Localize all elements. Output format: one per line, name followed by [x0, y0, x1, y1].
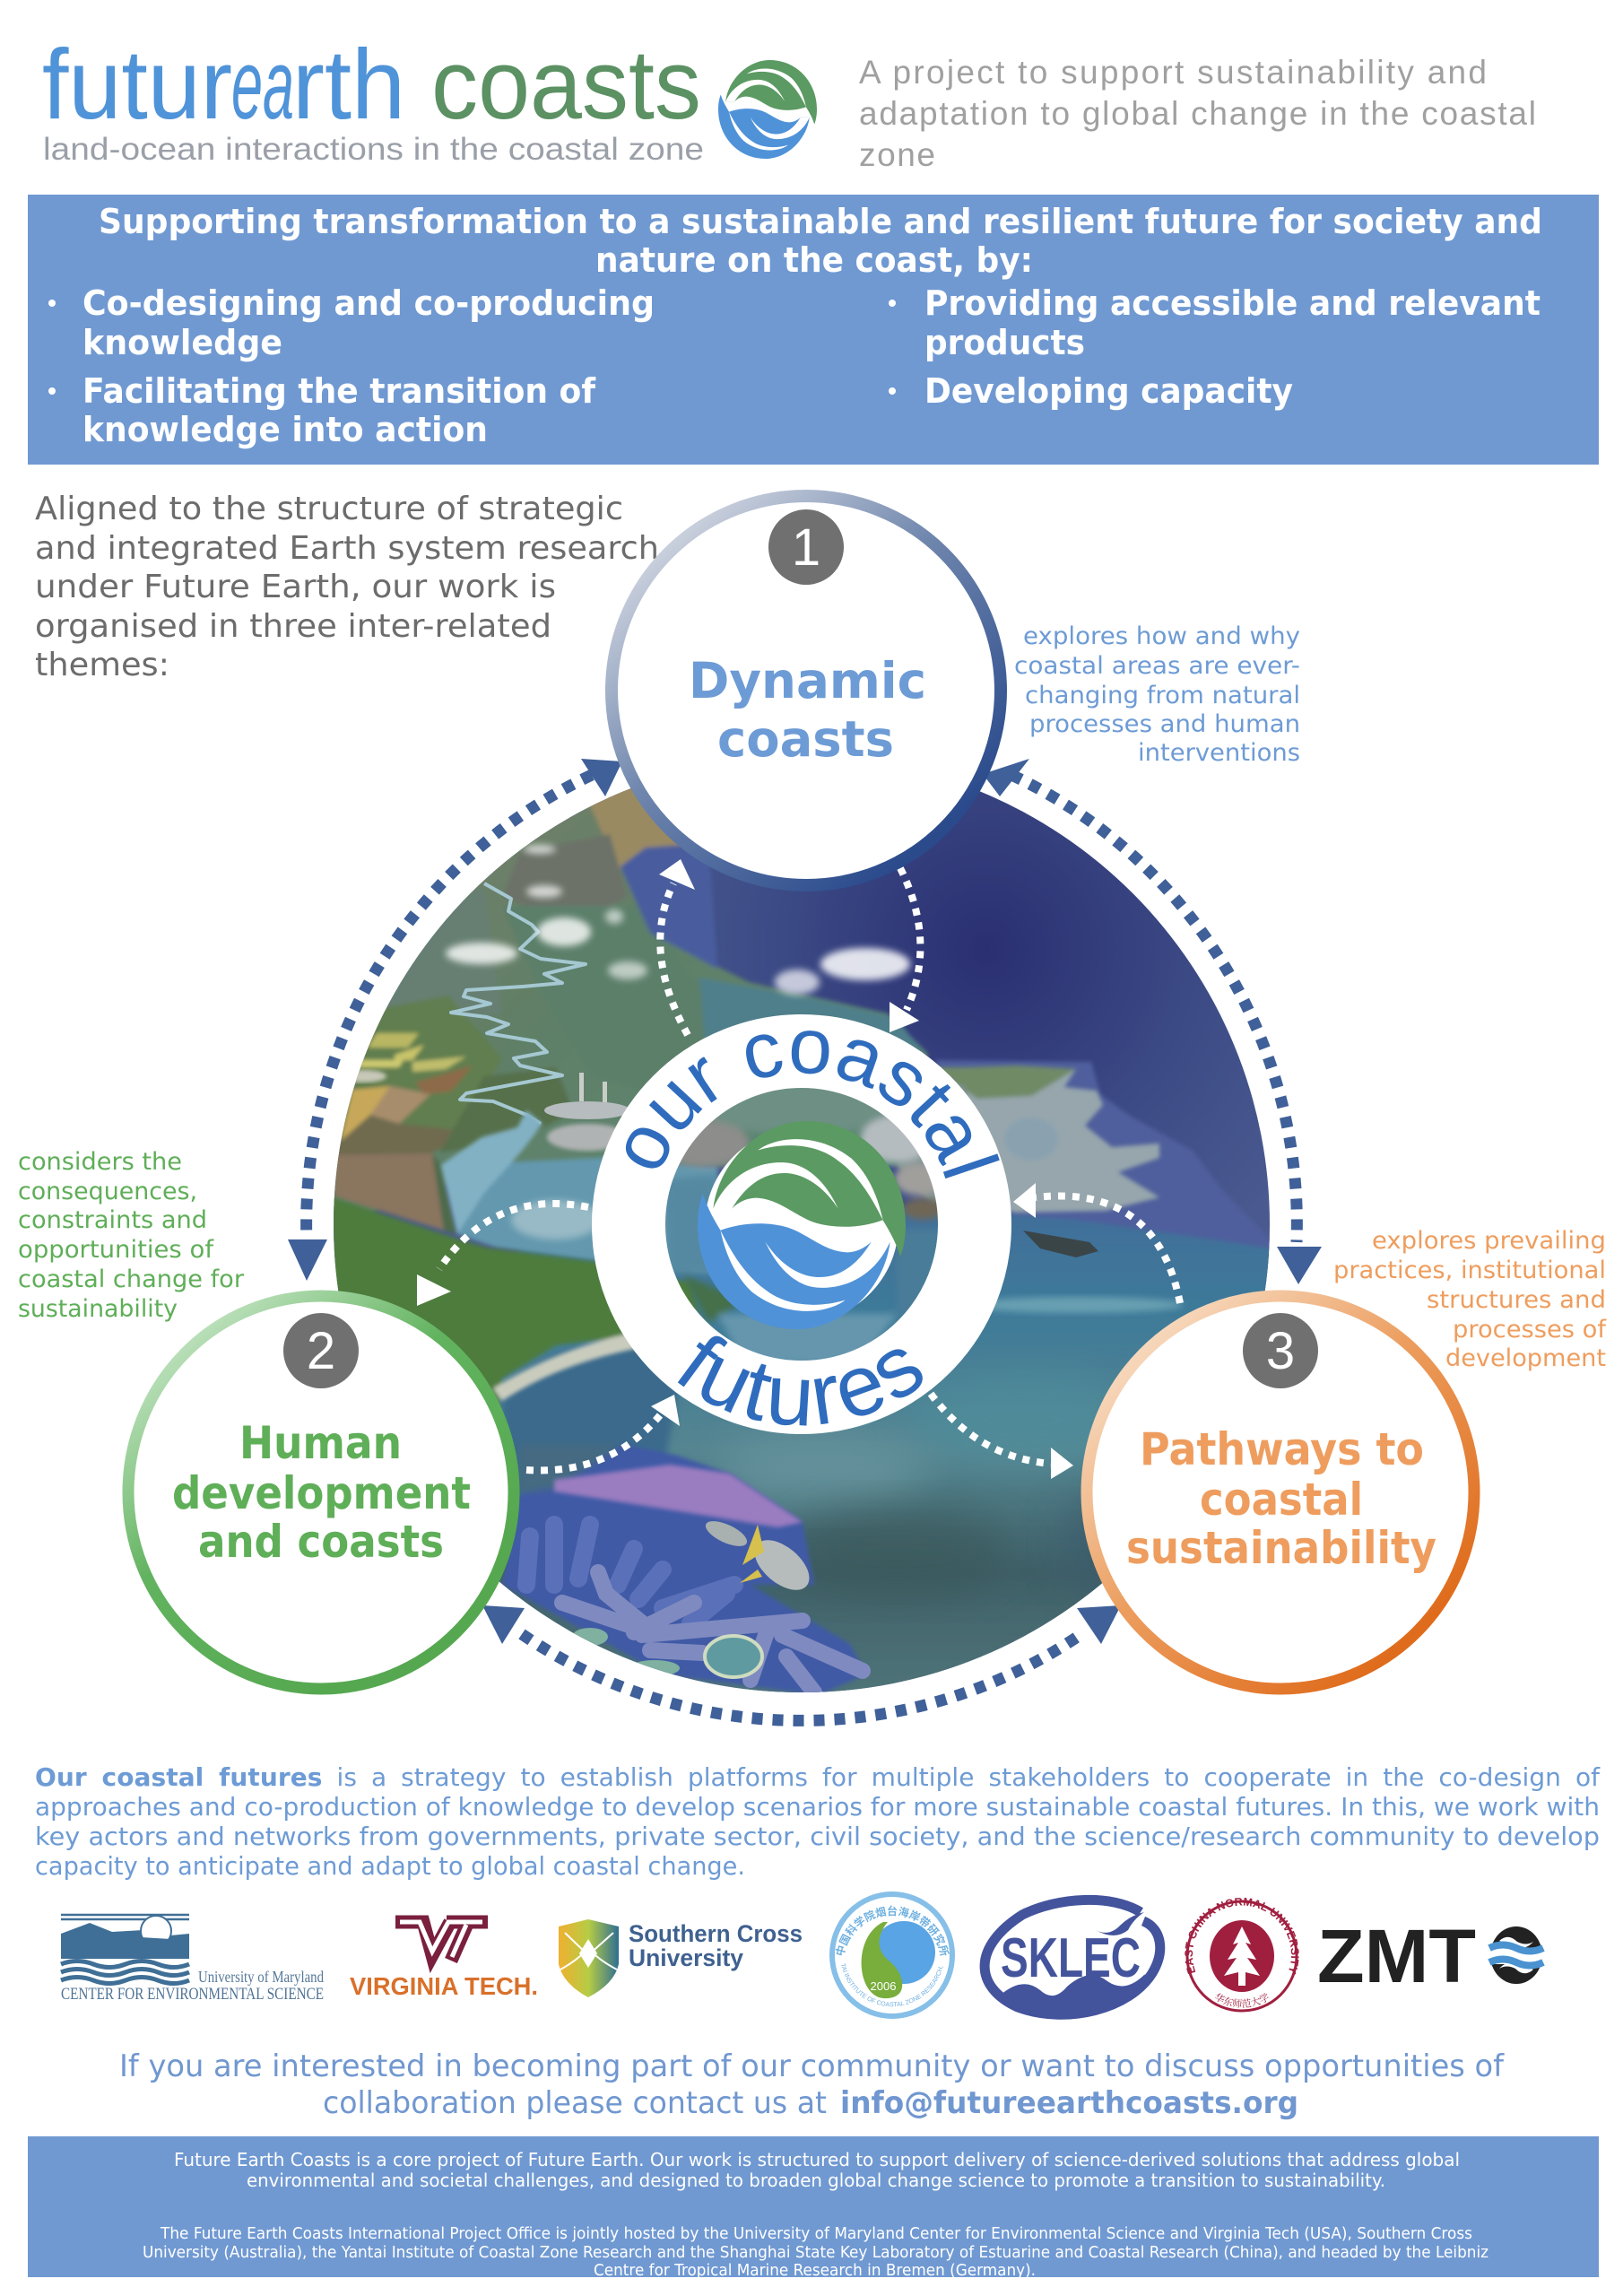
theme 1 title: Dynamic	[689, 652, 926, 709]
strategy paragraph: capacity to anticipate and adapt to global coastal change.	[35, 1851, 745, 1881]
outer arrow: dynamic coasts to human development	[288, 759, 622, 1281]
annotation: human development: opportunities of	[18, 1236, 215, 1264]
banner bullet list: Facilitating the transition of	[82, 371, 595, 411]
logo: Yantai Institute: 2006	[871, 1979, 896, 1993]
curved label: our coastal: our coastal	[626, 1031, 1000, 1178]
theme 2 title: development	[172, 1467, 471, 1519]
central swirl icon	[698, 1121, 906, 1329]
logo: East China Normal University: 华东师范大学	[1214, 1993, 1269, 2008]
theme 3 title	[1126, 1423, 1436, 1574]
ship	[1023, 1231, 1098, 1257]
annotation: human development: sustainability	[18, 1295, 178, 1323]
banner bullet list	[48, 283, 1541, 449]
logo: future earth coasts	[42, 30, 817, 167]
logo wordmark: futurearth: rth	[292, 30, 405, 140]
central view behind the logo	[659, 1081, 945, 1363]
banner bullet list: knowledge into action	[82, 410, 488, 449]
banner heading: nature on the coast, by:	[595, 240, 1033, 280]
logo: ZMT	[1317, 1914, 1543, 1998]
footer text: about	[174, 2149, 1460, 2191]
contact text: If you are interested in becoming part of our community or want to discuss opportunities of	[119, 2048, 1505, 2084]
central ring: our coastal futures	[592, 1014, 1011, 1434]
number badge 3	[1243, 1313, 1318, 1388]
annotation: pathways: processes of	[1453, 1316, 1608, 1344]
logo: Southern Cross University	[559, 1919, 803, 1997]
contact text	[119, 2048, 1505, 2121]
logo: SKLEC: SKLEC	[1001, 1927, 1141, 1989]
annotation: pathways: explores prevailing	[1372, 1227, 1606, 1255]
intro text: under Future Earth, our work is	[35, 569, 556, 605]
theme 3 title: coastal	[1200, 1474, 1363, 1526]
annotation: dynamic coasts: explores how and why	[1023, 622, 1300, 650]
forest	[334, 1196, 701, 1406]
strategy paragraph: approaches and co-production of knowledge to develop scenarios for more sustainable coastal futures. In this, we work with	[35, 1792, 1600, 1822]
annotation: dynamic coasts: changing from natural	[1025, 682, 1300, 709]
banner heading: Supporting transformation to a sustainable and resilient future for society and	[99, 202, 1542, 241]
tagline: A project to support sustainability and	[859, 54, 1487, 91]
logo: Yantai Institute: YANTAI INSTITUTE OF COASTAL ZONE RESEARCH, CAS	[841, 1962, 943, 2007]
estuary and bay	[441, 1110, 717, 1274]
annotation: pathways: practices, institutional	[1333, 1257, 1606, 1284]
footer text: about: environmental and societal challenges, and designed to broaden global change science to promote a transition to sustainability.	[247, 2170, 1385, 2191]
annotation: human development: consequences,	[18, 1178, 197, 1205]
theme 1 title	[689, 652, 926, 768]
annotation: dynamic coasts: coastal areas are ever-	[1014, 652, 1300, 680]
logo: Virginia Tech	[350, 1922, 538, 2000]
strategy paragraph: Our coastal futures is a strategy to establish platforms for multiple stakeholders to cooperate in the co-design of	[35, 1762, 1601, 1792]
coral reef and fish	[502, 1444, 866, 1695]
theme 2 title: Human	[239, 1417, 402, 1469]
theme circle 3: pathways to coastal sustainability	[1087, 1296, 1474, 1689]
UMCES text: University of Maryland	[198, 1968, 324, 1986]
logo: Southern Cross University: University	[629, 1944, 743, 1971]
logo: Yantai Institute: 中国科学院烟台海岸带研究所	[836, 1905, 950, 1956]
logo wordmark: futurearth: ea	[231, 30, 294, 140]
logo wordmark: futurearth: futur	[42, 30, 232, 140]
ZMT icon	[1489, 1926, 1543, 1984]
logo: SKLEC	[985, 1900, 1160, 2019]
banner bullet list: Developing capacity	[924, 371, 1293, 411]
strategy paragraph: key actors and networks from governments, private sector, civil society, and the science/research community to develop	[35, 1822, 1600, 1851]
power station and port	[544, 1073, 630, 1151]
logo: UMCES: CENTER FOR ENVIRONMENTAL SCIENCE	[61, 1985, 324, 2004]
number badge 1: 1	[792, 518, 820, 577]
contact text: info@futureearthcoasts.org	[840, 2085, 1298, 2121]
tagline: zone	[859, 136, 935, 173]
theme circle 2: human development and coasts	[128, 1296, 514, 1689]
theme 3 title: sustainability	[1126, 1522, 1436, 1574]
logo: East China Normal University: EAST CHINA NORMAL UNIVERSITY	[1185, 1898, 1299, 1975]
intro text: organised in three inter-related	[35, 608, 551, 645]
annotation: dynamic coasts	[1014, 622, 1300, 767]
outer arrow: human development to pathways	[482, 1605, 1121, 1720]
theme 2 title	[172, 1417, 471, 1568]
curved label: futures: futures	[678, 1336, 923, 1426]
logo subtitle: land-ocean interactions in the coastal zone	[43, 132, 704, 167]
number badge 2: 2	[307, 1322, 335, 1380]
annotation: human development	[18, 1148, 245, 1323]
intro text: Aligned to the structure of strategic	[35, 491, 623, 527]
annotation: human development: coastal change for	[18, 1265, 245, 1293]
logo swirl icon	[718, 60, 817, 159]
clouds	[446, 845, 910, 995]
logo: ZMT: ZMT	[1317, 1914, 1476, 1998]
intro text: themes:	[35, 647, 169, 683]
banner bullet list: products	[924, 323, 1085, 362]
panel: footer	[28, 2136, 1599, 2280]
city	[355, 1069, 389, 1083]
Southern Cross text: Southern Cross	[629, 1920, 803, 1947]
panel: mission banner	[28, 195, 1599, 465]
banner bullet list: Co-designing and co-producing	[82, 283, 655, 323]
theme circle 1: dynamic coasts	[612, 496, 1001, 885]
river meanders	[451, 883, 586, 1124]
shallow shelf	[935, 1060, 1273, 1283]
intro text: and integrated Earth system research	[35, 530, 659, 567]
number badge 2	[283, 1313, 359, 1388]
banner bullet list: knowledge	[82, 323, 282, 362]
contact text: collaboration please contact us at	[323, 2085, 827, 2121]
central coastal landscape image	[332, 753, 1273, 1695]
logo: Yantai Institute	[829, 1892, 955, 2019]
tagline	[859, 54, 1536, 173]
footer text: hosts	[143, 2224, 1488, 2280]
theme 1 title: coasts	[717, 710, 894, 768]
number badge 3: 3	[1266, 1322, 1295, 1380]
inner dotted arrows	[417, 859, 1180, 1479]
number badge 1	[768, 509, 844, 585]
outer arrow: dynamic coasts to pathways	[983, 759, 1322, 1284]
theme 2 title: and coasts	[198, 1516, 444, 1568]
logo wordmark: futurearth	[42, 30, 405, 140]
logo wordmark: coasts: coasts	[431, 30, 701, 140]
ocean	[499, 1209, 1270, 1692]
footer text: hosts: University (Australia), the Yantai Institute of Coastal Zone Research and the Shanghai State Key Laboratory of Estuarine and Coastal Research (China), and headed by the Leibniz	[143, 2243, 1488, 2262]
logo: UMCES	[61, 1915, 324, 2004]
Virginia Tech text: VIRGINIA TECH.	[350, 1972, 538, 2000]
annotation: dynamic coasts: processes and human	[1029, 710, 1300, 738]
land: estuary and floodplain	[332, 771, 1159, 1234]
annotation: pathways: development	[1445, 1344, 1606, 1372]
footer text: about: Future Earth Coasts is a core project of Future Earth. Our work is structured to support delivery of science-derived solutions that address global	[174, 2149, 1460, 2170]
theme 3 title: Pathways to	[1140, 1423, 1424, 1475]
annotation: human development: considers the	[18, 1148, 182, 1176]
footer text: hosts: The Future Earth Coasts International Project Office is jointly hosted by the University of Maryland Center for Environmental Science and Virginia Tech (USA), Southern Cross	[160, 2224, 1472, 2243]
annotation: pathways: structures and	[1427, 1286, 1606, 1314]
annotation: human development: constraints and	[18, 1206, 207, 1234]
intro text	[35, 491, 659, 683]
strategy paragraph	[35, 1762, 1601, 1881]
annotation: pathways	[1333, 1227, 1608, 1372]
annotation: dynamic coasts: interventions	[1138, 739, 1300, 767]
banner heading	[99, 202, 1542, 280]
tagline: adaptation to global change in the coastal	[859, 95, 1536, 132]
footer text: hosts: Centre for Tropical Marine Research in Bremen (Germany).	[594, 2261, 1036, 2280]
banner bullet list: Providing accessible and relevant	[924, 283, 1541, 323]
logo: East China Normal University	[1185, 1898, 1299, 2013]
